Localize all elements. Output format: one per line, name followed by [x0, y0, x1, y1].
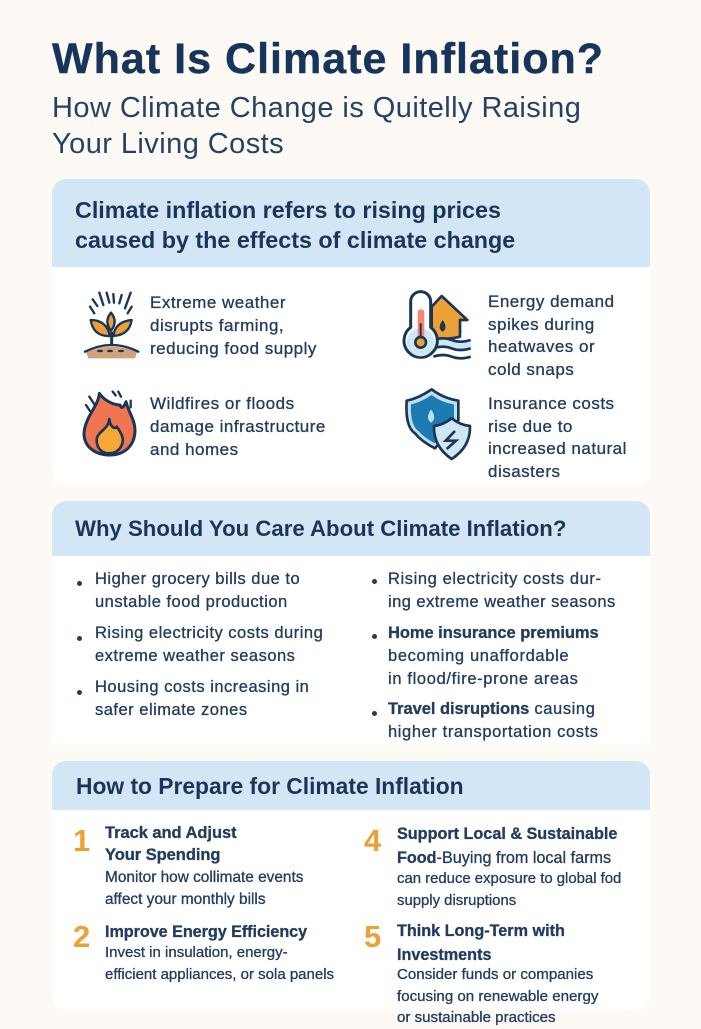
step 5: 5	[364, 919, 381, 954]
panel: definition	[52, 179, 650, 487]
step 5: focusing on renewable energy	[397, 988, 598, 1004]
step 2: Invest in insulation, energy-	[105, 944, 288, 961]
step 1: Monitor how collimate events	[105, 869, 303, 886]
text: extreme weather: reducing food supply	[150, 339, 317, 358]
step 4: Support Local & Sustainable	[397, 825, 617, 843]
prepare heading: How to Prepare for Climate Inflation	[76, 773, 464, 799]
prepare heading	[52, 761, 650, 810]
bullet list: right: ing extreme weather seasons	[388, 593, 616, 611]
bullet list: right: Home insurance premiums	[388, 624, 599, 642]
step 2	[73, 919, 334, 983]
bullet list: right	[372, 570, 616, 741]
bullet list: left: extreme weather seasons	[95, 647, 295, 665]
bullet list: right: Travel disruptions causing	[388, 700, 596, 718]
title: What Is Climate Inflation?	[52, 35, 604, 83]
step 1: Track and Adjust	[105, 824, 237, 842]
subtitle: Your Living Costs	[52, 128, 284, 160]
text: wildfires: and homes	[150, 440, 239, 459]
step 4: can reduce exposure to global fod	[397, 871, 621, 887]
text: wildfires	[150, 394, 326, 459]
icon: plant	[84, 292, 140, 358]
step 2: 2	[73, 919, 90, 954]
step 4	[364, 823, 621, 909]
text: insurance costs: disasters	[488, 462, 561, 480]
text: wildfires: damage infrastructure	[150, 417, 326, 436]
subtitle: How Climate Change is Quitelly Raising	[52, 92, 581, 124]
panel: why care	[52, 501, 650, 745]
definition heading: caused by the effects of climate change	[75, 227, 515, 253]
bullet list: right: higher transportation costs	[388, 723, 599, 741]
text: insurance costs: increased natural	[488, 439, 627, 458]
bullet list: left: Higher grocery bills due to	[95, 570, 300, 588]
bullet list: left: Housing costs increasing in	[95, 678, 309, 696]
step 5	[364, 919, 599, 1026]
step 2: efficient appliances, or sola panels	[105, 966, 334, 983]
text: insurance costs	[488, 394, 627, 480]
bullet list: right: in flood/fire-prone areas	[388, 670, 579, 688]
text: energy demand: Energy demand	[488, 292, 615, 311]
subtitle	[52, 92, 581, 160]
step 4: supply disruptions	[397, 893, 516, 909]
step 5: Investments	[397, 946, 491, 964]
text: energy demand: heatwaves or	[488, 337, 595, 356]
text: energy demand	[488, 292, 615, 379]
bullet list: left: Rising electricity costs during	[95, 624, 323, 642]
step 2: Improve Energy Efficiency	[105, 923, 307, 941]
bullet list: right: becoming unaffordable	[388, 647, 569, 665]
text: extreme weather: disrupts farming,	[150, 316, 284, 335]
bullet list: right: Rising electricity costs dur-	[388, 570, 602, 588]
text: energy demand: spikes during	[488, 314, 595, 334]
step 5: Consider funds or companies	[397, 966, 593, 983]
step 1: 1	[73, 823, 90, 858]
panel: how to prepare	[52, 761, 650, 1010]
definition heading: Climate inflation refers to rising prices	[75, 197, 501, 223]
step 4: 4	[364, 823, 381, 858]
step 1: Your Spending	[105, 846, 220, 864]
step 1	[73, 823, 303, 908]
text: energy demand: cold snaps	[488, 360, 574, 378]
step 1: affect your monthly bills	[105, 891, 266, 908]
icon: thermometer and house	[402, 290, 472, 360]
text: insurance costs: rise due to	[488, 416, 573, 436]
bullet list: left	[77, 570, 323, 719]
definition heading	[52, 179, 650, 267]
bullet list: left: unstable food production	[95, 593, 288, 611]
bullet list: left: safer elimate zones	[95, 701, 248, 719]
text: extreme weather	[150, 293, 317, 358]
text: wildfires: Wildfires or floods	[150, 394, 295, 413]
text: extreme weather: Extreme weather	[150, 293, 286, 312]
icon: flame	[82, 390, 136, 456]
step 4: Food-Buying from local farms	[397, 849, 611, 867]
step 5: Think Long-Term with	[397, 922, 565, 940]
why care heading	[52, 501, 650, 556]
why care heading: Why Should You Care About Climate Inflation?	[75, 516, 566, 541]
icon: shield	[405, 388, 472, 460]
step 5: or sustainable practices	[397, 1009, 556, 1026]
text: insurance costs: Insurance costs	[488, 394, 615, 413]
